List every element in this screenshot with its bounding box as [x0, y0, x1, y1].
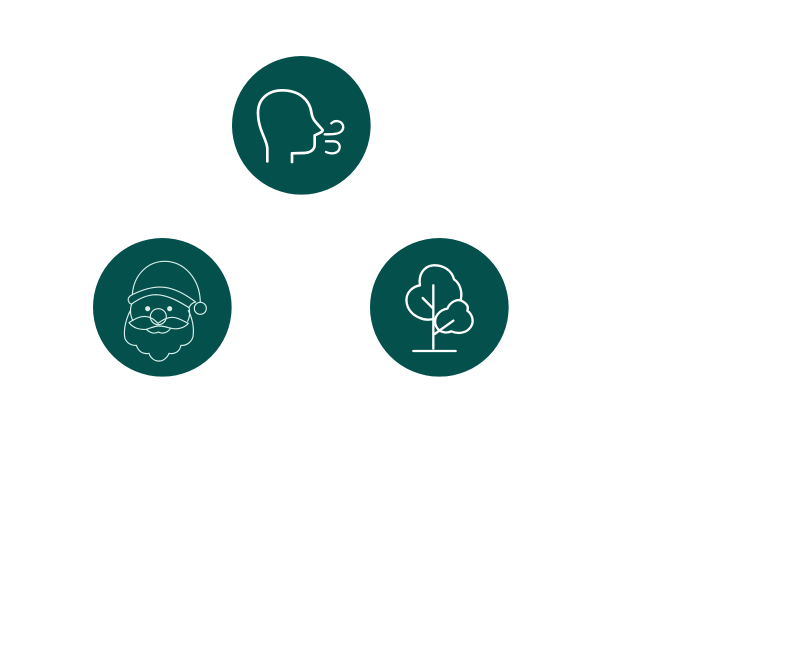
pom-pom — [194, 302, 206, 314]
hat brim — [128, 287, 196, 308]
icon: santa claus face — [93, 238, 232, 377]
ground line — [413, 347, 456, 354]
mouth — [146, 329, 170, 333]
main canopy — [406, 265, 461, 320]
trunk and branches — [423, 285, 453, 349]
icon: tree — [370, 238, 509, 377]
nose — [150, 309, 166, 325]
eyes — [146, 307, 150, 311]
icon: person breathing out — [232, 56, 371, 195]
hat — [132, 261, 200, 302]
moustache — [129, 316, 188, 329]
face and beard — [131, 304, 190, 321]
small canopy — [435, 300, 473, 333]
